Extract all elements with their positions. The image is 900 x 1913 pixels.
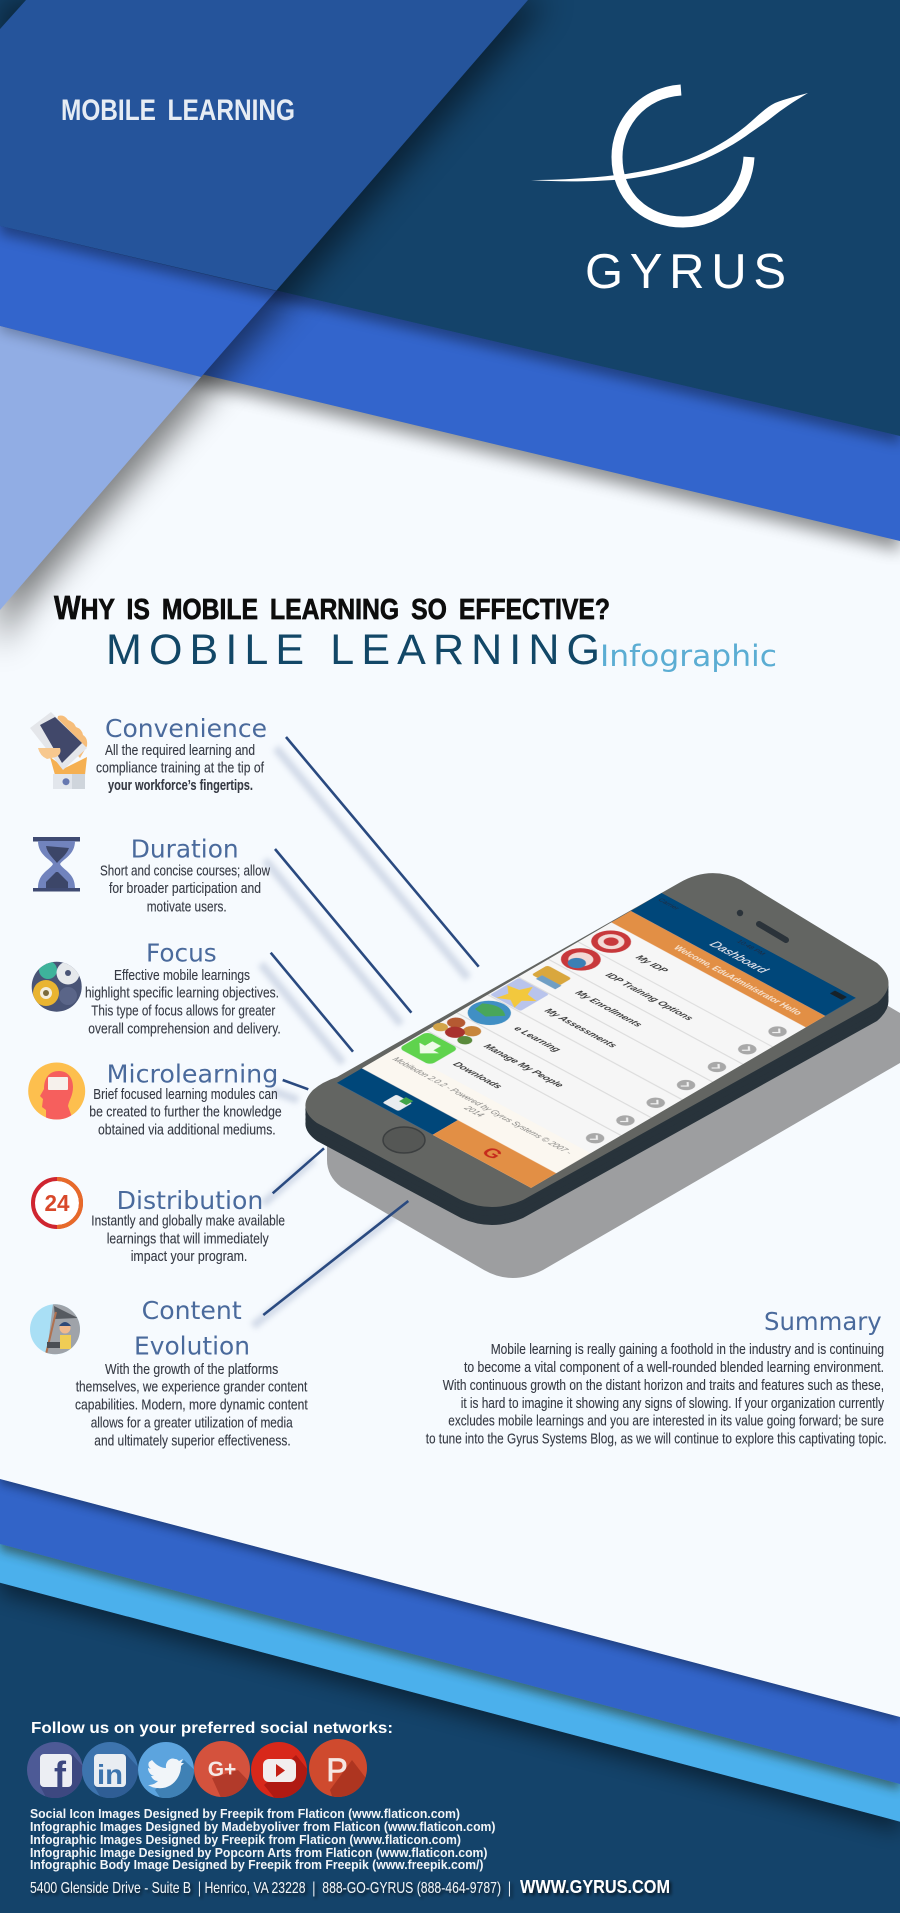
phone shadow bbox=[327, 930, 900, 1278]
row labels: IDP Training Options bbox=[602, 972, 696, 1022]
body text: themselves, we experience grander content bbox=[76, 1379, 308, 1396]
row chevrons bbox=[582, 1024, 791, 1146]
home button bbox=[383, 1127, 425, 1153]
status and titles bbox=[620, 897, 847, 1022]
body text bbox=[85, 967, 281, 1037]
heading: why is mobile learning so effective: WHY IS MOBILE LEARNING SO EFFECTIVE? bbox=[54, 589, 610, 626]
heading: Duration bbox=[131, 835, 239, 864]
icon: facebook bbox=[27, 1742, 82, 1798]
screen header bbox=[631, 893, 856, 1016]
bottom navigation bar bbox=[337, 1068, 556, 1188]
icon: pinterest bbox=[309, 1739, 367, 1797]
body text: highlight specific learning objectives. bbox=[85, 985, 279, 1002]
heading: mobile learning infographic: MOBILE LEARNING bbox=[106, 626, 600, 674]
row labels: Downloads bbox=[450, 1061, 505, 1090]
heading bbox=[134, 1296, 250, 1360]
status and titles: Carrier bbox=[656, 898, 681, 911]
heading: Summary bbox=[764, 1307, 882, 1336]
credits text: Infographic Image Designed by Popcorn Arts from Flaticon (www.flaticon.com) bbox=[30, 1845, 488, 1860]
panel: microlearning bbox=[28, 1060, 282, 1139]
body text: and ultimately superior effectiveness. bbox=[94, 1432, 291, 1449]
panel: footer geometric background bbox=[0, 1450, 900, 1913]
screen footer text: 2014 bbox=[461, 1105, 486, 1118]
body text: Instantly and globally make available bbox=[91, 1213, 285, 1230]
body text bbox=[89, 1086, 282, 1139]
body text bbox=[75, 1361, 308, 1449]
body text: Effective mobile learnings bbox=[114, 967, 250, 984]
credits text: Infographic Body Image Designed by Freepik from Freepik (www.freepik.com/) bbox=[30, 1857, 484, 1872]
logo: gyrus bbox=[531, 90, 808, 299]
panel: distribution bbox=[33, 1179, 285, 1265]
phone screen bbox=[335, 892, 856, 1188]
list rows bbox=[396, 922, 806, 1153]
status and titles: 10:48 PM bbox=[734, 939, 767, 957]
panel: convenience bbox=[30, 712, 267, 794]
body text: Brief focused learning modules can bbox=[93, 1086, 278, 1103]
body text: your workforce’s fingertips. bbox=[108, 777, 253, 794]
heading: Evolution bbox=[134, 1331, 250, 1360]
heading: Microlearning bbox=[107, 1060, 278, 1089]
panel: content evolution bbox=[30, 1296, 308, 1449]
body text bbox=[91, 1213, 285, 1265]
row labels: My Enrollments bbox=[572, 989, 644, 1029]
phone face bbox=[305, 873, 888, 1207]
icon: 24 hour clock: 24 bbox=[44, 1190, 70, 1216]
status and titles: Welcome, EduAdministrator Hello bbox=[671, 944, 805, 1017]
credits text bbox=[30, 1806, 496, 1872]
icon: google plus bbox=[194, 1741, 250, 1797]
icon: twitter bbox=[138, 1742, 194, 1798]
icon: linkedin: in bbox=[97, 1759, 123, 1790]
heading: mobile learning infographic: Infographic bbox=[600, 639, 777, 673]
heading: Convenience bbox=[105, 714, 267, 743]
icon: figure climbing bbox=[30, 1304, 80, 1354]
panel: duration bbox=[33, 835, 270, 915]
body text: capabilities. Modern, more dynamic content bbox=[75, 1397, 308, 1414]
credits text: Infographic Images Designed by Madebyoliver from Flaticon (www.flaticon.com) bbox=[30, 1819, 496, 1834]
body text: allows for a greater utilization of media bbox=[91, 1414, 293, 1431]
welcome bar bbox=[611, 911, 825, 1027]
phone camera and speaker bbox=[737, 910, 786, 940]
contact line: 5400 Glenside Drive - Suite B | Henrico, VA 23228 | 888-GO-GYRUS (888-464-9787) | bbox=[30, 1880, 511, 1897]
heading: follow us: Follow us on your preferred social networks: bbox=[31, 1720, 393, 1737]
social icons bbox=[27, 1739, 367, 1798]
icon: gears bbox=[32, 961, 82, 1012]
row labels: e Learning bbox=[511, 1025, 563, 1054]
icon: pinterest: P bbox=[326, 1752, 348, 1788]
icon: 24 hour clock bbox=[33, 1179, 81, 1227]
icon: head with book bbox=[28, 1062, 85, 1120]
icon: facebook: f bbox=[54, 1754, 67, 1795]
icon: google plus: G+ bbox=[208, 1758, 236, 1781]
body text: be created to further the knowledge bbox=[89, 1104, 282, 1121]
logo: gyrus: GYRUS bbox=[585, 245, 786, 299]
panel: summary bbox=[426, 1307, 887, 1447]
contact line: WWW.GYRUS.COM bbox=[520, 1877, 670, 1897]
icon: hourglass bbox=[33, 837, 80, 892]
row labels: My Assessments bbox=[541, 1007, 619, 1050]
body text: obtained via additional mediums. bbox=[98, 1122, 276, 1139]
body text: learnings that will immediately bbox=[107, 1230, 269, 1247]
row labels bbox=[450, 954, 726, 1111]
panel: focus bbox=[32, 939, 281, 1037]
body text: overall comprehension and delivery. bbox=[88, 1020, 281, 1037]
row labels: My IDP bbox=[632, 954, 671, 975]
body text: for broader participation and bbox=[109, 880, 261, 897]
heading: Content bbox=[142, 1296, 242, 1325]
body text: Short and concise courses; allow bbox=[100, 863, 270, 880]
body text: With the growth of the platforms bbox=[105, 1361, 278, 1378]
credits text: Infographic Images Designed by Freepik from Flaticon (www.flaticon.com) bbox=[30, 1832, 461, 1847]
body text: All the required learning and bbox=[105, 742, 255, 759]
bottom navigation bar: G bbox=[476, 1145, 507, 1162]
body text: This type of focus allows for greater bbox=[91, 1003, 275, 1020]
body text bbox=[426, 1341, 887, 1447]
heading: Distribution bbox=[117, 1186, 263, 1215]
phone side bbox=[305, 877, 888, 1225]
credits text: Social Icon Images Designed by Freepik from Flaticon (www.flaticon.com) bbox=[30, 1806, 460, 1821]
row labels: Manage My People bbox=[480, 1043, 566, 1089]
body text: motivate users. bbox=[147, 898, 227, 915]
panel: header geometric background bbox=[0, 0, 900, 650]
icon: linkedin bbox=[82, 1742, 138, 1798]
body text bbox=[100, 863, 270, 915]
heading: Focus bbox=[146, 939, 217, 968]
row icons bbox=[396, 924, 642, 1066]
status and titles: Dashboard bbox=[706, 939, 772, 976]
connector lines foreground bbox=[263, 737, 479, 1315]
connector line shadows bbox=[253, 748, 468, 1326]
body text: compliance training at the tip of bbox=[96, 760, 265, 777]
body text bbox=[96, 742, 265, 794]
icon: hand holding phone bbox=[30, 712, 87, 789]
screen footer text: Mobiledon 2.0.2 - Powered by Gyrus Systems © 2007 - bbox=[390, 1056, 574, 1156]
phone illustration bbox=[305, 873, 888, 1225]
icon: youtube bbox=[251, 1742, 307, 1798]
body text: impact your program. bbox=[131, 1248, 247, 1265]
title: mobile learning: MOBILE LEARNING bbox=[61, 94, 295, 127]
